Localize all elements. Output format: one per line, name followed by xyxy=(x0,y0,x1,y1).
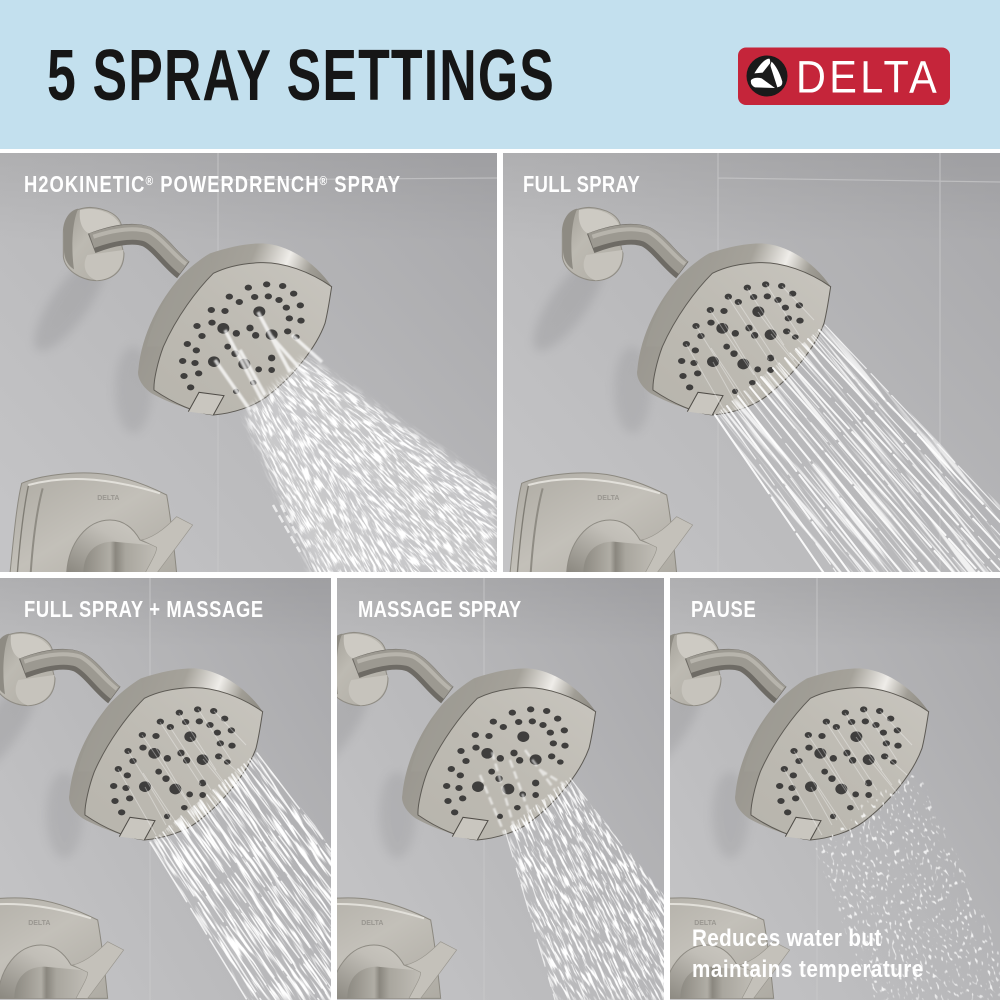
water droplets xyxy=(784,709,1000,1000)
logo: Delta xyxy=(738,48,950,105)
shower valve xyxy=(337,897,457,999)
shower head xyxy=(22,207,332,433)
title: 5 SPRAY SETTINGS xyxy=(47,36,554,116)
panel label: MASSAGE SPRAY xyxy=(358,597,521,623)
panel label: ® xyxy=(319,174,327,188)
logo: Delta: DELTA xyxy=(796,53,937,103)
shower valve xyxy=(510,473,693,573)
panel: pause xyxy=(670,578,1000,1000)
panel: full spray + massage xyxy=(0,578,331,1000)
panel label: SPRAY xyxy=(328,172,400,198)
shower head xyxy=(286,632,596,858)
water spray xyxy=(213,310,497,572)
panel label: FULL SPRAY xyxy=(523,172,640,198)
shower valve xyxy=(670,897,790,999)
panel: H2OKinetic PowerDrench spray xyxy=(0,153,497,573)
caption xyxy=(692,925,923,982)
panel label: FULL SPRAY + MASSAGE xyxy=(24,597,263,623)
shower valve xyxy=(10,473,193,573)
water spray xyxy=(686,284,1000,572)
panel: massage spray xyxy=(337,578,664,1000)
header band xyxy=(0,0,1000,149)
water spray xyxy=(480,750,664,1000)
panel label: H2OKINETIC xyxy=(24,172,144,198)
shower valve xyxy=(0,898,124,998)
panel label: POWERDRENCH xyxy=(154,172,318,198)
panel label: PAUSE xyxy=(691,597,756,623)
panel: full spray xyxy=(503,153,1000,573)
panel label: ® xyxy=(145,174,153,188)
caption: Reduces water but xyxy=(692,925,882,951)
shower head xyxy=(0,632,263,858)
shower head xyxy=(521,207,831,433)
water spray xyxy=(118,709,331,1000)
shower head xyxy=(670,632,930,856)
caption: maintains temperature xyxy=(692,956,923,982)
